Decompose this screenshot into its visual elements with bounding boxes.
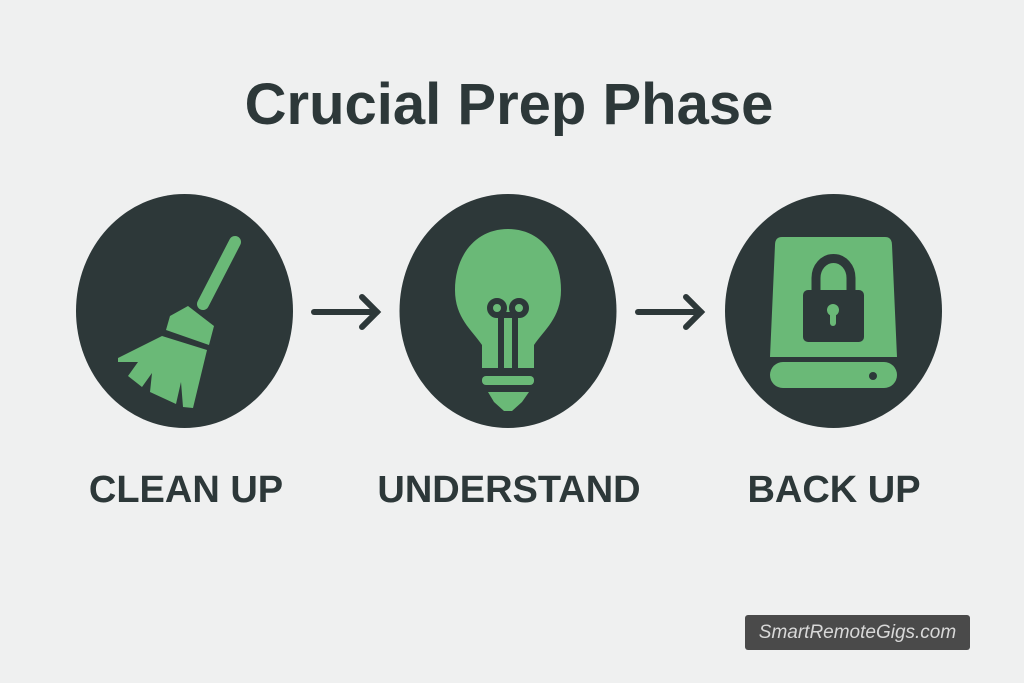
watermark [745, 615, 970, 650]
icon: locked drive circle [725, 194, 942, 428]
watermark: SmartRemoteGigs.com [759, 622, 956, 643]
icon: lightbulb circle [400, 194, 616, 428]
label: back up: BACK UP [747, 469, 921, 511]
label: clean up: CLEAN UP [89, 469, 283, 511]
label: understand: UNDERSTAND [377, 469, 641, 511]
title: Crucial Prep Phase [245, 72, 773, 137]
arrow 1 [314, 297, 377, 327]
icon: broom circle [76, 194, 293, 428]
arrow 2 [638, 297, 701, 327]
